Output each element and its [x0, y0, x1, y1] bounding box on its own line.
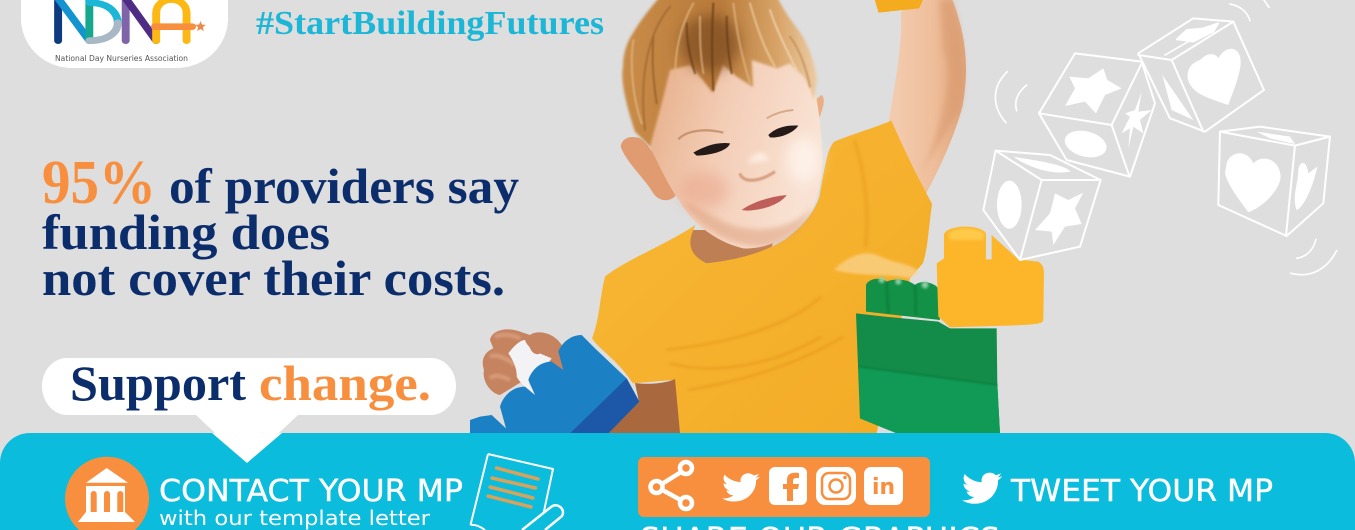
eyes [693, 143, 730, 156]
shirt [592, 121, 932, 433]
contact your MP text [159, 474, 463, 530]
face [647, 50, 822, 248]
tweet your MP text: TWEET YOUR MP [1010, 474, 1273, 509]
eyebrows [678, 130, 723, 139]
motion lines [995, 0, 1337, 275]
social media box [638, 457, 930, 517]
die 4 [1218, 127, 1330, 236]
hashtag: #StartBuildingFutures [256, 5, 604, 42]
headline: of providers say [169, 158, 519, 214]
raised arm [888, 0, 966, 193]
speech bubble: call to action: Support [70, 355, 246, 411]
panel: actions [0, 433, 1355, 530]
nose [740, 172, 775, 180]
die 3 [1138, 18, 1264, 132]
blue block [470, 335, 639, 433]
icon: facebook [769, 467, 807, 505]
yellow block in raised hand [875, 0, 923, 13]
icon: letter and pencil [470, 454, 563, 530]
photo: child playing with building blocks [470, 0, 1044, 433]
icon: share [650, 462, 692, 509]
neck [690, 230, 773, 264]
headline: not cover their costs. [42, 250, 505, 306]
speech bubble: call to action: change. [259, 355, 431, 411]
icon: linkedin: in [872, 475, 895, 500]
icon: instagram [816, 467, 856, 505]
icon: linkedin [864, 467, 903, 505]
die 1 [983, 151, 1101, 260]
icon: twitter [962, 473, 1002, 504]
dice illustration [983, 0, 1337, 275]
headline: 95% [42, 149, 156, 217]
yellow block [937, 227, 1044, 327]
headline: funding does [42, 204, 330, 260]
hair [622, 0, 817, 147]
hand and toy [470, 329, 639, 433]
die 2 [1039, 53, 1155, 177]
shirt folds [666, 140, 867, 390]
headline [42, 161, 519, 296]
icon: twitter [722, 473, 760, 502]
icon: parliament building [65, 457, 149, 530]
lower left arm [607, 379, 680, 433]
mouth [742, 195, 787, 211]
contact your MP text: with our template letter [159, 506, 431, 530]
contact your MP text: CONTACT YOUR MP [159, 474, 463, 509]
logo: NDNA [21, 0, 228, 68]
speech bubble: call to action [42, 358, 456, 433]
ears [621, 137, 676, 200]
green block [856, 277, 1000, 433]
head [621, 0, 824, 248]
logo caption: National Day Nurseries Association [55, 54, 188, 63]
